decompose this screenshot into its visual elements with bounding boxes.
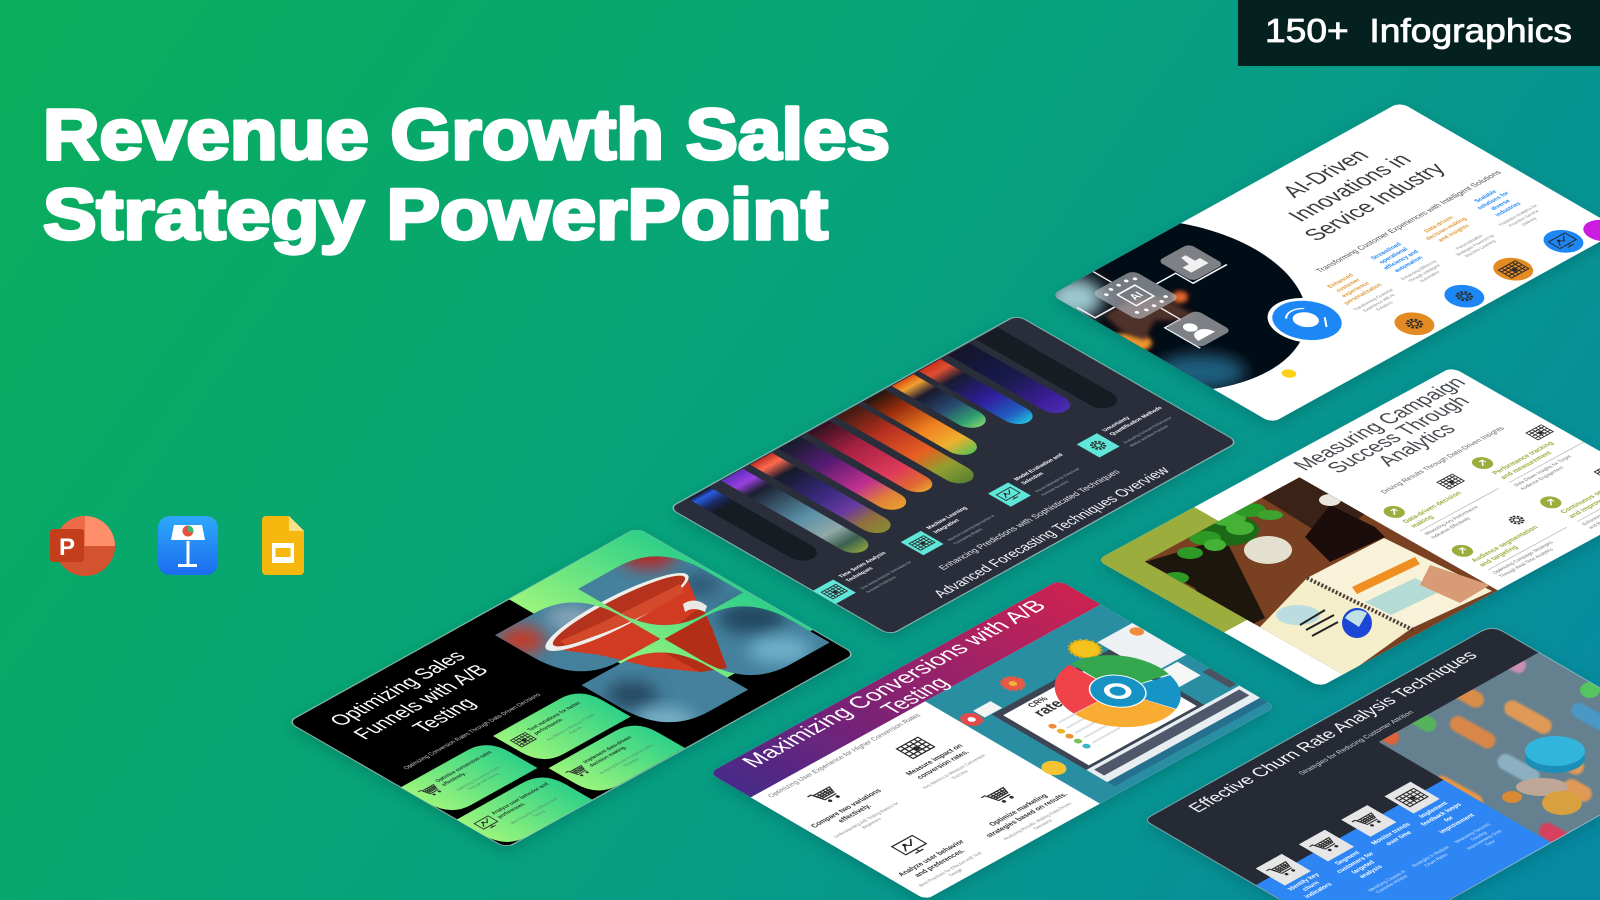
column: industries: Delivery — [1520, 216, 1539, 226]
item: Model Evaluation — [987, 453, 1091, 511]
item: Machine Learning: Forecasting Models — [953, 528, 984, 545]
column: automation: Automation — [1418, 270, 1442, 283]
slide: Measuring Campaign Success — [1097, 367, 1600, 690]
item: Optimize marketing: Analyzing Results: Making Data-Driven — [1002, 801, 1073, 841]
item: Uncertainty Quantification: Evaluating Forecast Performance — [1123, 416, 1173, 444]
column: industries: diverse — [1490, 199, 1513, 212]
column: insights: decision-making — [1425, 217, 1469, 241]
illustration: laptop with donut chart: rate — [1029, 697, 1068, 719]
item: Model Evaluation: Model Evaluation and — [1013, 453, 1066, 482]
step: Segment customers: analysis — [1358, 864, 1385, 880]
card: Analyze user behavior: preferences. — [496, 802, 528, 819]
purple circle — [1583, 220, 1600, 241]
step: Implement feedback loops: Tracking — [1469, 831, 1488, 842]
item: Time Series Analysis: Techniques — [845, 566, 875, 583]
item: Time Series Analysis: Time Series Analysis Techniques for — [859, 560, 913, 590]
column: insights: Machine Learning — [1463, 239, 1497, 258]
column: personalization: customer — [1335, 278, 1363, 293]
icon: blue globe — [1251, 289, 1363, 352]
icon: PowerPoint: P — [59, 534, 75, 561]
item: Audience segmentation: Optimizing Campaign Strategies — [1491, 540, 1556, 575]
column: personalization: Experience with AI — [1361, 293, 1396, 312]
icon: PowerPoint — [50, 516, 115, 576]
item: Data-driven decision making — [1384, 474, 1499, 539]
card: Optimize conversion rates: effectively. — [440, 771, 469, 787]
heading: Success Through — [1322, 393, 1475, 476]
heading — [1249, 130, 1452, 244]
item: Analyze user behavior — [890, 834, 982, 887]
item: Machine Learning: Machine Learning — [925, 506, 970, 530]
step: Implement feedback loops: feedback loops — [1419, 802, 1464, 827]
item: Audience segmentation — [1452, 516, 1567, 578]
heading: Advanced Forecasting Techniques Overview — [930, 465, 1174, 600]
heading: Innovations in — [1282, 150, 1417, 225]
step: Implement feedback loops: Improvements Over — [1465, 829, 1504, 850]
step: Monitor trends: Monitor trends — [1370, 822, 1413, 846]
card: Test variations — [493, 688, 631, 765]
column: insights — [1417, 212, 1549, 288]
item: Data-driven decision making: Indicators Effectively — [1430, 516, 1473, 540]
subtitle: Transforming Customer Experiences with Intelligent Solutions — [1313, 169, 1504, 274]
heading: Optimizing Sales — [325, 648, 471, 730]
photo: AI chip on dark circle — [1055, 223, 1303, 389]
slide: Maximizing Conversions — [709, 579, 1277, 900]
column: automation: Streamlined — [1370, 242, 1404, 261]
column: automation: Enhancing Efficiency — [1399, 259, 1438, 281]
card: Implement data-driven: decision making. — [588, 745, 629, 768]
step: Monitor trends: Strategies to Reduce — [1410, 845, 1451, 868]
badge: 150+ Infographics: 150+ Infographics — [1265, 12, 1572, 49]
header band — [709, 580, 1101, 797]
item: Audience segmentation: and targeting — [1478, 545, 1520, 568]
card: Test variations: Key Metrics to Measure in Sales — [545, 713, 596, 741]
column: personalization: experience — [1341, 281, 1372, 299]
column: insights: Data-driven — [1423, 216, 1456, 234]
card: Implement data-driven — [548, 720, 685, 797]
step: Segment customers: Customer Attrition — [1374, 874, 1410, 894]
column: insights: and insights — [1437, 224, 1472, 243]
item: Uncertainty Quantification: Quantification Methods — [1109, 406, 1164, 437]
slide: AI-Driven Innovations — [1040, 102, 1600, 440]
step: Monitor trends: Churn Rates — [1423, 852, 1450, 867]
step: Identify key churn indicators: Identify key — [1286, 872, 1322, 892]
column: automation: efficiency and — [1383, 250, 1421, 271]
step: Implement feedback loops: Time — [1484, 839, 1497, 847]
heading: Service Industry — [1298, 159, 1452, 244]
column: industries: Predictive Analytics for — [1497, 203, 1539, 227]
card: Test variations: Test variations for better — [526, 701, 583, 732]
forecast colour bars — [688, 327, 1130, 575]
photo: 3D pie chart pieces — [1378, 652, 1600, 843]
item: Machine Learning: Machine Learning Approaches in — [947, 514, 996, 542]
heading: Effective Churn Rate Analysis Techniques — [1184, 648, 1482, 815]
item: Uncertainty Quantification: Metrics and Best Practices — [1129, 425, 1169, 447]
item: Time Series Analysis: Time Series Analysis — [838, 551, 888, 579]
step: Implement feedback loops: Implement — [1417, 800, 1451, 819]
card: Optimize conversion rates: Through A/B Testing — [466, 772, 500, 791]
item: Machine Learning: Integration — [933, 518, 962, 535]
slide: Effective Churn Rate — [1148, 609, 1600, 900]
item: Optimize marketing: strategies based on results. — [983, 791, 1070, 839]
card: Optimize conversion rates: Optimizing Conversion Rates — [454, 765, 502, 792]
item: Measure impact: Key Metrics to Measure Conversion — [922, 753, 987, 789]
column: industries: Proactive Service — [1507, 209, 1540, 227]
item: Measure impact — [896, 736, 986, 789]
item: Uncertainty Quantification: Uncertainty — [1102, 415, 1133, 433]
heading: AI-Driven — [1276, 146, 1375, 201]
item: Optimize marketing: Optimize marketing — [986, 792, 1050, 827]
heading: Maximizing Conversions with A/B — [736, 596, 1052, 771]
illustration: laptop with donut chart — [960, 623, 1268, 786]
card: Analyze user behavior: Testing — [531, 809, 546, 818]
subtitle: Optimizing Conversion Rates Through Data-Driven Decisions — [403, 693, 543, 771]
item: Machine Learning — [900, 502, 1002, 559]
card: Analyze user behavior: Best Practices for Effective A/B — [509, 797, 559, 825]
item: Measure impact: conversion rates. — [914, 749, 971, 780]
column: industries — [1465, 185, 1597, 260]
slide: Advanced Forecasting — [669, 315, 1238, 635]
icon: Keynote — [158, 516, 218, 575]
column: personalization: Solutions — [1374, 300, 1395, 311]
item: Compare two variations: Compare two variations — [808, 787, 884, 829]
slide base — [1148, 628, 1600, 900]
column: personalization: Transforming Customer — [1352, 287, 1395, 311]
blue panel — [1256, 779, 1552, 900]
card: Analyze user behavior: Analyze user behavior and — [490, 782, 551, 816]
card: Implement data-driven: Implement data-driven — [582, 735, 634, 764]
card: Optimize conversion rates — [401, 739, 537, 816]
item: Data-driven decision making: making — [1410, 515, 1436, 529]
card: Implement data-driven: Strategies — [621, 757, 641, 767]
step: Identify key churn indicators: indicators — [1303, 882, 1335, 899]
heading: Testing — [875, 673, 955, 718]
heading — [325, 648, 518, 756]
card: Optimize conversion rates: Optimize conversion rates — [434, 750, 494, 784]
item: Model Evaluation: Proven Methods for Enhanced — [1034, 468, 1080, 493]
item: Model Evaluation: Forecast Accuracy — [1040, 480, 1070, 496]
item: Data-driven decision making: Measuring Key Performance — [1423, 505, 1480, 536]
card: Test variations: Funnels — [567, 725, 584, 735]
title: Strategy PowerPoint — [43, 176, 828, 255]
step: Segment customers: Identifying Causes of — [1367, 869, 1407, 892]
column: automation: automation — [1393, 256, 1425, 273]
item: Performance tracking: Data-Driven Insights for Target — [1513, 454, 1574, 488]
column: personalization — [1320, 269, 1449, 343]
item: Measure impact: Success — [950, 769, 970, 780]
item: Time Series Analysis — [812, 548, 919, 608]
heading: Measuring Campaign — [1288, 374, 1471, 474]
slide: Optimizing Sales Funnels — [288, 520, 855, 848]
subtitle: Strategies for Reducing Customer Attrition — [1297, 710, 1416, 776]
item: Audience segmentation: Audience segmentation — [1470, 525, 1540, 563]
subtitle: Enhancing Predictions with Sophisticated Techniques — [936, 468, 1122, 571]
step: Identify key churn indicators — [1254, 853, 1336, 900]
illustration panel — [925, 604, 1276, 804]
AI chip panels: AI — [1127, 290, 1147, 302]
item: Analyze user behavior: Analyze user behavior — [895, 838, 967, 878]
title: Revenue Growth Sales — [43, 96, 890, 175]
item: Performance tracking — [1472, 424, 1584, 490]
item: Analyze user behavior: Best Practices for Effective A/B Test — [918, 851, 984, 887]
column: industries: Scalable — [1474, 189, 1499, 204]
slide outline — [1148, 628, 1600, 900]
item: Audience segmentation: Through Real-Time Analytics — [1498, 547, 1556, 579]
item: Time Series Analysis: Accurate Predictions — [865, 576, 897, 594]
step: Implement feedback loops: Measuring Success: — [1453, 822, 1492, 844]
icon: Google Slides — [262, 516, 304, 575]
step: Implement feedback loops — [1379, 778, 1512, 855]
item: Compare two variations: Understanding A/B Testing Basics for — [832, 801, 900, 839]
AI chip panels — [1076, 245, 1229, 349]
step: Segment customers: customers for — [1335, 851, 1377, 874]
title — [43, 96, 890, 255]
column: personalization: personalization — [1343, 283, 1384, 306]
item: Data-driven decision making: Data-driven decision — [1402, 491, 1464, 525]
item: Performance tracking: Audience Engagement — [1519, 466, 1566, 491]
heading: Analytics — [1372, 420, 1461, 469]
step: Implement feedback loops: improvement — [1438, 812, 1477, 835]
badge: 150+ Infographics — [1238, 0, 1600, 66]
column: automation: operational — [1378, 247, 1410, 265]
column: personalization: Enhanced — [1327, 273, 1356, 289]
column: industries: solutions for — [1476, 191, 1512, 211]
step: Segment customers — [1294, 827, 1412, 895]
green block — [509, 528, 813, 701]
yellow dot — [1279, 368, 1299, 379]
card: Test variations: performance. — [533, 717, 566, 736]
item: Measure impact: Measure impact on — [903, 742, 965, 777]
illustration: laptop with donut chart: CR% — [1025, 695, 1051, 709]
item: Model Evaluation: Selection — [1020, 471, 1046, 486]
item: Compare two variations: effectively. — [835, 802, 874, 824]
card: Analyze user behavior — [457, 771, 593, 848]
item: Compare two variations — [807, 786, 898, 838]
item: Optimize marketing: Decisions — [1032, 818, 1054, 830]
step: Segment customers: targeted — [1350, 860, 1377, 875]
photo: red funnel in four petals — [495, 556, 830, 722]
heading: Funnels with A/B — [349, 662, 494, 743]
item: Continuous optimization — [1540, 468, 1600, 529]
item: Analyze user behavior: Design — [947, 868, 964, 877]
item: Compare two variations: Beginners — [861, 817, 883, 829]
column: insights: Personalization — [1454, 234, 1484, 250]
item: Analyze user behavior: and preferences. — [911, 847, 967, 878]
step: Monitor trends — [1336, 802, 1457, 872]
subtitle: Driving Results Through Data-Driven Insights — [1380, 426, 1507, 495]
photo: desk with plant and notebook — [1144, 477, 1498, 674]
item: Performance tracking: and measurement — [1499, 450, 1555, 480]
step: Implement feedback loops: for — [1443, 815, 1456, 823]
step: Segment customers: Segment — [1334, 850, 1363, 866]
column: industries: industries — [1494, 201, 1524, 218]
step: Monitor trends: over time — [1384, 830, 1414, 847]
subtitle: Optimizing User Experience for Higher Conversion Rates — [767, 712, 923, 799]
column: automation: Through Intelligent — [1407, 263, 1442, 283]
item: Performance tracking: Performance tracking — [1491, 441, 1556, 476]
column: insights: Strategies Powered by — [1454, 233, 1496, 257]
card: Implement data-driven: Analyzing Results to Improve Sales — [598, 743, 654, 775]
column: automation — [1367, 240, 1496, 314]
heading: Testing — [408, 695, 481, 736]
item: Uncertainty Quantification — [1076, 402, 1183, 462]
olive block — [1097, 507, 1321, 632]
step: Identify key churn indicators: churn — [1301, 880, 1322, 892]
